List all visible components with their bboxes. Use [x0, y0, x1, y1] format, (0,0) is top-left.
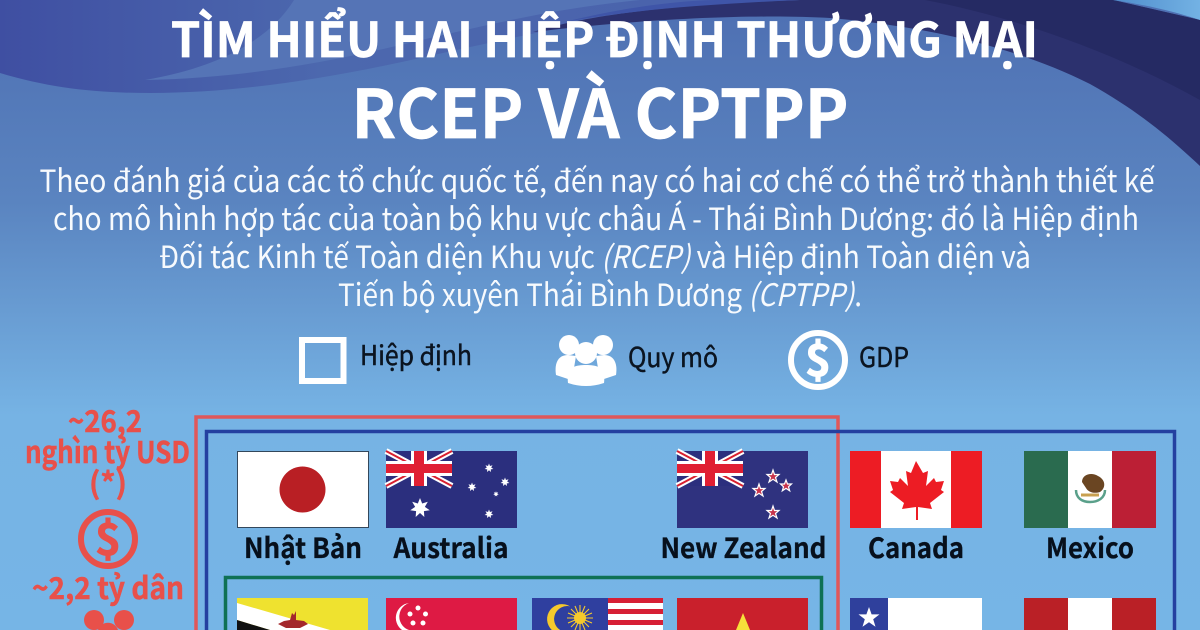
label: Canada: Canada	[868, 527, 964, 567]
title line 2: RCEP VÀ CPTPP	[352, 61, 848, 158]
legend: GDP	[791, 325, 909, 389]
flag: New Zealand	[677, 451, 808, 528]
flag: Singapore	[386, 598, 517, 630]
flag: Vietnam	[677, 598, 808, 630]
label: GDP: GDP	[859, 336, 909, 375]
icon: people red	[84, 610, 134, 630]
label: Mexico: Mexico	[1046, 527, 1134, 567]
header wave: left	[0, 0, 720, 93]
GDP value: nghìn tỷ USD	[25, 428, 190, 472]
overlap frame	[226, 578, 822, 630]
flag: Malaysia	[532, 598, 663, 630]
legend: scale	[556, 335, 718, 386]
legend: agreement	[302, 334, 472, 381]
icon: square	[302, 340, 344, 381]
flag: Chile	[850, 598, 982, 630]
header wave: light sweep	[145, 0, 640, 80]
title line 1: TÌM HIỂU HAI HIỆP ĐỊNH THƯƠNG MẠI	[171, 1, 1038, 71]
flag: Canada	[850, 451, 982, 528]
icon: people	[556, 335, 616, 386]
label: agreement: Hiệp định	[360, 334, 472, 373]
flag: Australia	[386, 451, 517, 528]
icon: dollar	[791, 325, 845, 389]
RCEP frame	[196, 417, 838, 630]
label: scale: Quy mô	[628, 336, 718, 375]
icon: dollar red	[81, 504, 135, 568]
flag: Japan	[238, 452, 368, 528]
flag: Peru	[1024, 598, 1156, 630]
header wave: navy swoosh	[533, 0, 1200, 166]
flag: Brunei	[237, 598, 368, 630]
population value: ~2,2 tỷ dân	[32, 564, 184, 608]
label: Japan: Nhật Bản	[244, 527, 362, 567]
GDP value	[25, 397, 190, 503]
header wave: navy shade	[925, 0, 1200, 100]
CPTPP frame	[206, 432, 1174, 630]
intro paragraph: Tiến bộ xuyên Thái Bình Dương (CPTPP).	[338, 270, 862, 315]
intro paragraph: Đối tác Kinh tế Toàn diện Khu vực (RCEP) và Hiệp định Toàn diện và	[159, 232, 1031, 277]
RCEP stats	[25, 397, 190, 630]
header wave: blue band over navy	[565, 0, 800, 22]
GDP value: ~26,2	[68, 397, 142, 441]
header wave: top right corner	[1113, 0, 1200, 20]
intro paragraph	[40, 156, 1155, 315]
flag: Mexico	[1024, 451, 1156, 528]
label: Australia: Australia	[393, 527, 508, 567]
label: New Zealand: New Zealand	[660, 527, 826, 567]
GDP value: (*)	[89, 459, 127, 503]
